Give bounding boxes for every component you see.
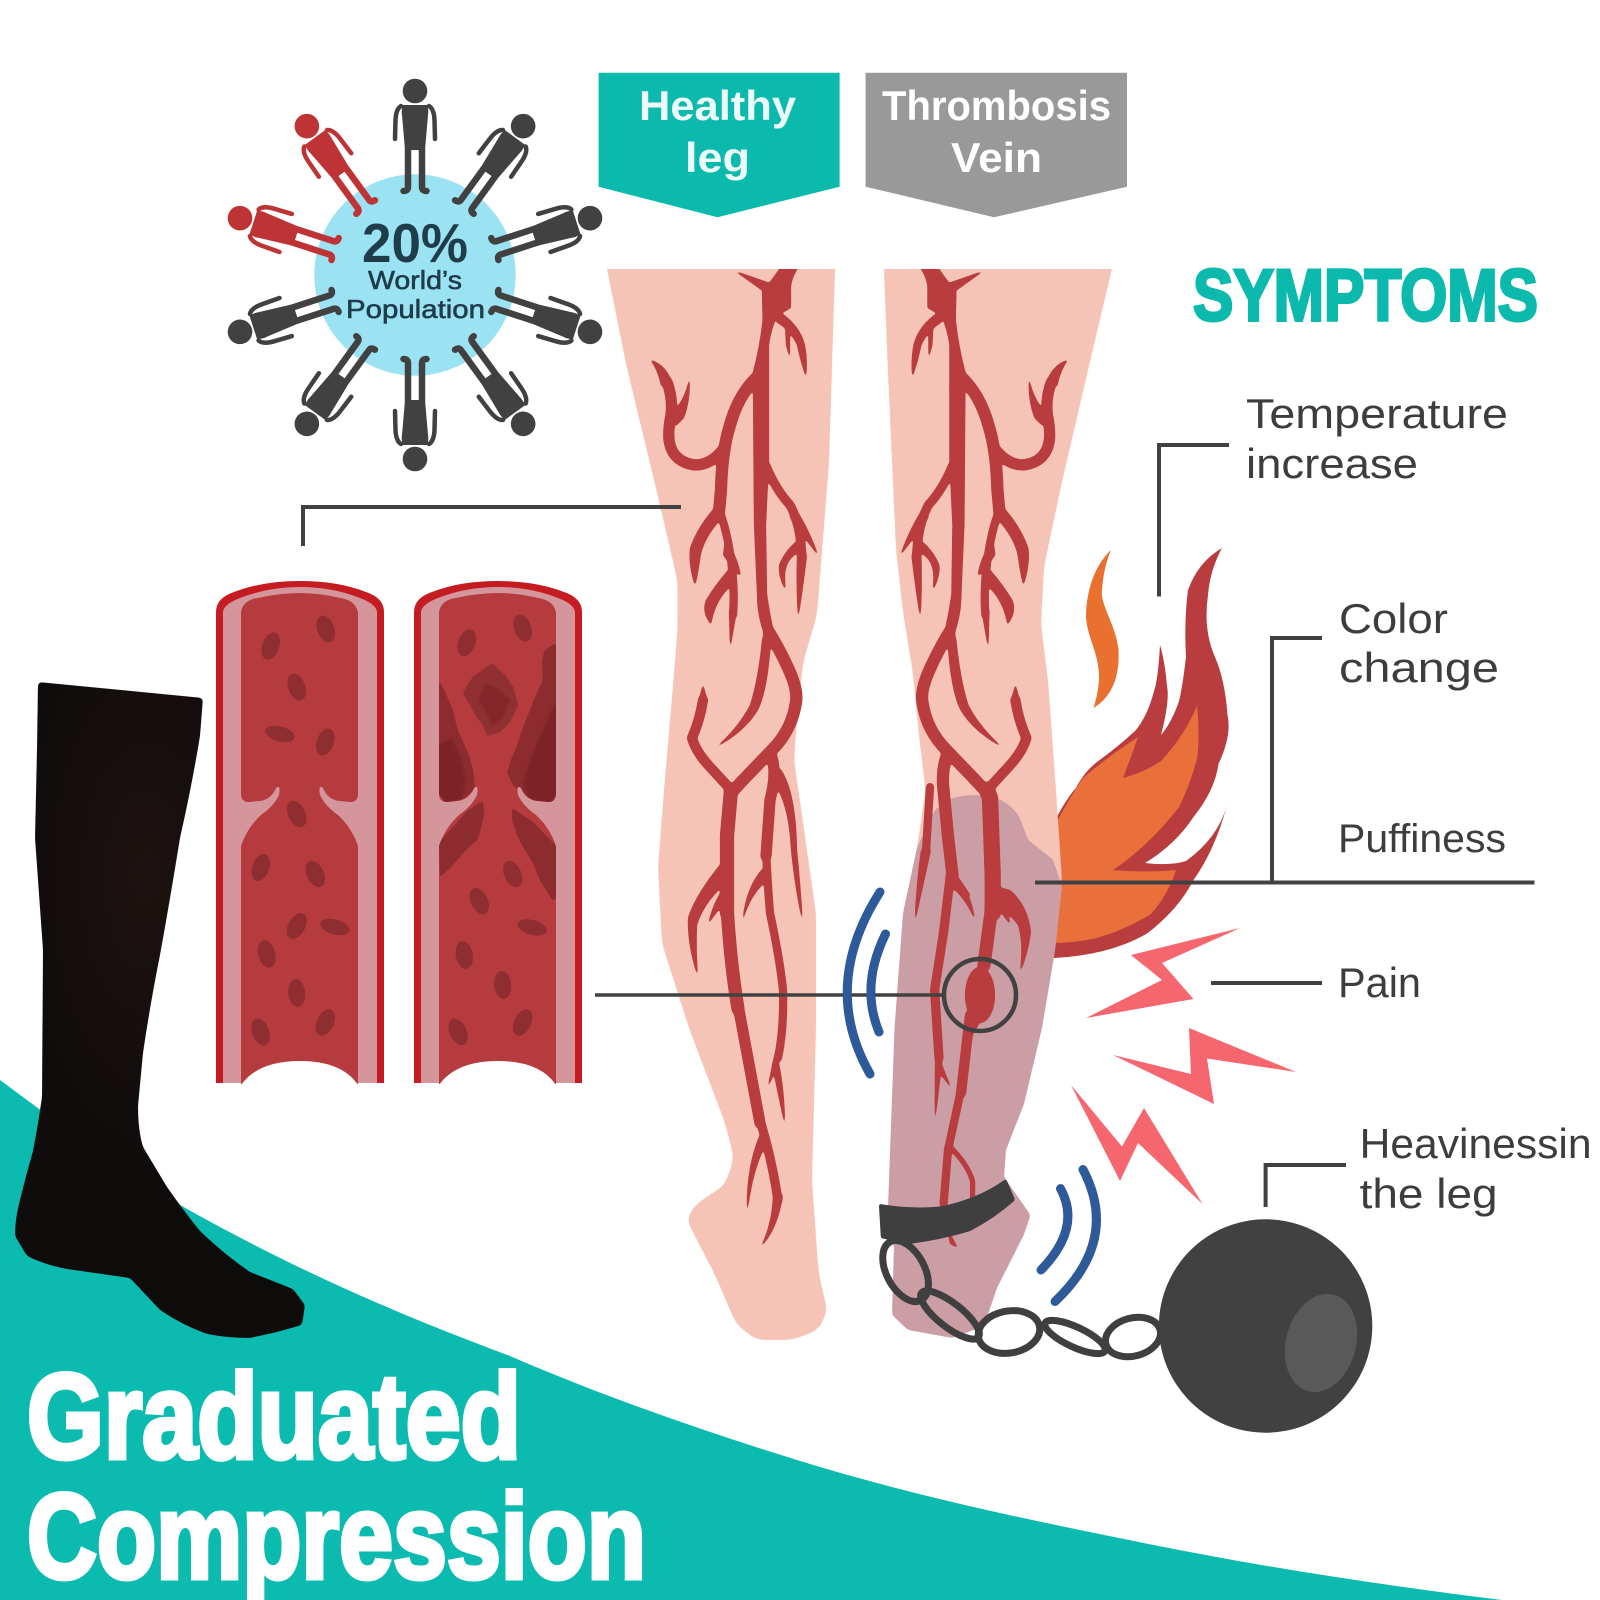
blue circle — [314, 174, 516, 376]
footer title: Graduated Compression — [27, 1348, 646, 1600]
teal curved footer band — [0, 1080, 1502, 1600]
statistic text: 20% — [362, 212, 468, 274]
statistic text: World’s — [368, 265, 462, 295]
footer title: Graduated Compression: Compression — [27, 1468, 646, 1600]
banner: Healthy leg: Healthy — [639, 82, 797, 129]
footer title: Graduated Compression: Graduated — [27, 1348, 521, 1484]
symptom: Heaviness in the leg: the leg — [1360, 1170, 1498, 1217]
flame: temperature increase — [1050, 548, 1229, 958]
chain links — [873, 1233, 1165, 1363]
symptom: Temperature increase: increase — [1246, 440, 1418, 487]
blue vibration arcs: ankle — [1041, 1170, 1096, 1302]
symptom: Color change: Color — [1339, 595, 1448, 642]
leg silhouette — [884, 269, 1112, 948]
iron ball — [1159, 1219, 1372, 1433]
compression sock photo — [15, 682, 305, 1338]
symptom: Temperature increase — [1159, 390, 1508, 596]
blood clots — [439, 643, 558, 901]
symptom: Heaviness in the leg — [1266, 1120, 1592, 1217]
leg silhouette — [600, 240, 838, 1340]
connector: vein to vessel cross-section — [303, 507, 681, 546]
symptom: Color change: change — [1339, 644, 1499, 691]
banner: Thrombosis Vein: Vein — [951, 134, 1042, 181]
banner: Healthy leg: leg — [685, 134, 750, 181]
symptom: Puffiness: Puffiness — [1338, 817, 1506, 861]
symptom: Color change — [1272, 595, 1499, 882]
blood vessel: healthy — [216, 581, 384, 1085]
heading: SYMPTOMS: SYMPTOMS — [1193, 256, 1538, 336]
statistic text: Population — [346, 294, 485, 324]
symptom: Pain: Pain — [1338, 959, 1421, 1006]
swollen area — [888, 795, 1062, 1338]
healthy leg — [600, 240, 838, 1340]
population statistic graphic — [222, 79, 608, 471]
ring of people — [222, 79, 608, 471]
vein callout: circle and line to vessel — [595, 959, 1016, 1031]
blood vessel: thrombosis — [414, 581, 582, 1085]
ball and chain — [873, 1179, 1372, 1433]
symptom: Heaviness in the leg: Heavinessin — [1360, 1120, 1592, 1167]
banner: Thrombosis Vein: Thrombosis — [882, 82, 1111, 129]
red blood cells — [445, 612, 549, 1048]
banner: Healthy leg — [599, 73, 840, 217]
thrombosis leg — [881, 240, 1118, 1338]
ankle shackle — [879, 1179, 1015, 1244]
statistic text — [346, 212, 485, 324]
veins — [650, 265, 819, 1248]
pain lightning bolts — [1071, 928, 1296, 1204]
blue vibration arcs: calf — [847, 892, 886, 1074]
red blood cells — [248, 613, 351, 1048]
banner: Thrombosis Vein — [866, 73, 1127, 217]
veins — [900, 265, 1068, 1248]
symptom: Temperature increase: Temperature — [1246, 390, 1508, 437]
ball highlight — [1274, 1286, 1368, 1400]
